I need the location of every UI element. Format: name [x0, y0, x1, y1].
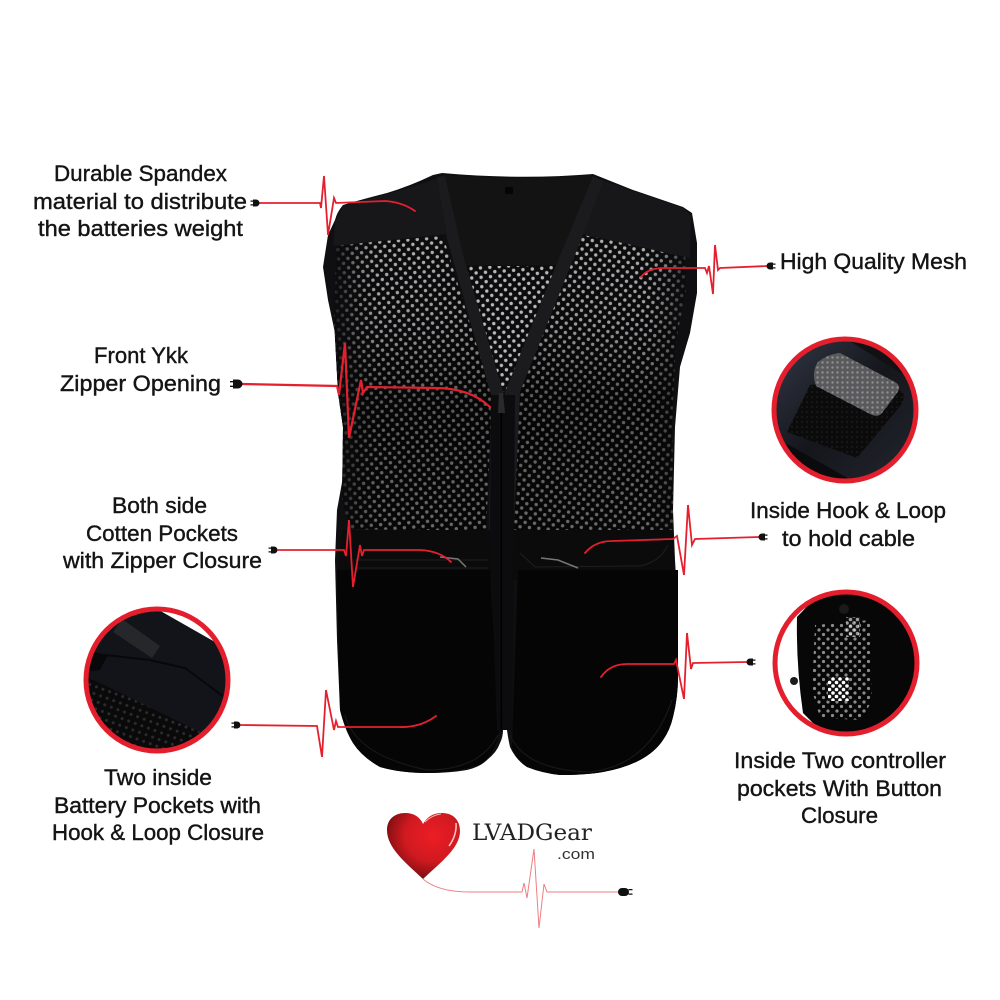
back neck panel [444, 175, 593, 265]
logo wordmark: LVADGear [472, 821, 592, 846]
callout line: mesh [641, 245, 776, 294]
text: spandex: Durable Spandex [54, 161, 228, 186]
text: controller pockets: Closure [801, 803, 878, 828]
right shoulder yoke [582, 180, 691, 258]
left pocket zipper [355, 557, 488, 568]
plug icon [268, 546, 278, 554]
plug icon [767, 262, 776, 270]
callout line: hook and loop [585, 505, 768, 575]
text: spandex [33, 161, 247, 241]
left shoulder yoke [333, 178, 446, 246]
text: side pockets: Cotten Pockets [86, 521, 238, 546]
hem binding [345, 700, 672, 772]
callout line: side pockets [268, 520, 451, 587]
text: side pockets [62, 493, 262, 573]
plug icon [230, 380, 242, 388]
plug icon [758, 534, 768, 540]
text: battery pockets: Two inside [104, 765, 212, 790]
text: hook and loop [750, 498, 946, 551]
vest [323, 173, 697, 775]
text: hook and loop: to hold cable [782, 526, 915, 551]
detail circle: controller pocket [770, 590, 925, 740]
text: battery pockets: Battery Pockets with [54, 793, 261, 818]
text: mesh: High Quality Mesh [780, 249, 967, 274]
text: side pockets: Both side [112, 493, 207, 518]
text: spandex: the batteries weight [38, 216, 244, 241]
detail circle: battery pocket [84, 606, 230, 754]
plug icon [232, 722, 240, 728]
text: side pockets: with Zipper Closure [62, 548, 262, 573]
plug icon [618, 888, 632, 896]
left zipper band [437, 176, 504, 530]
heart icon [387, 813, 460, 879]
plug icon [250, 200, 260, 206]
text: zipper [60, 343, 221, 396]
logo domain: .com [557, 846, 595, 863]
logo heartbeat line [423, 849, 621, 928]
detail circle: hook and loop [770, 335, 920, 485]
plug icon [746, 658, 756, 666]
infographic canvas [34, 164, 966, 928]
text: controller pockets [734, 748, 947, 828]
text: battery pockets [52, 765, 264, 845]
text: controller pockets: pockets With Button [737, 776, 942, 801]
text: controller pockets: Inside Two controller [734, 748, 947, 773]
callout line: zipper [230, 343, 490, 438]
logo: LVADGear [387, 813, 632, 928]
text: hook and loop: Inside Hook & Loop [750, 498, 946, 523]
callout line: spandex [250, 176, 415, 235]
right pocket zipper [520, 545, 668, 568]
right front mesh [512, 235, 686, 531]
left front mesh [334, 236, 492, 531]
text: spandex: material to distribute [33, 189, 247, 214]
lower pockets [337, 570, 678, 775]
right zipper band [505, 176, 603, 530]
callout line: battery pockets [232, 690, 436, 757]
front placket and zipper [490, 393, 515, 732]
vest body [323, 173, 697, 775]
callout line: controller pockets [601, 633, 756, 699]
text: battery pockets: Hook & Loop Closure [52, 820, 264, 845]
neck label [505, 187, 513, 194]
text: zipper: Zipper Opening [60, 371, 221, 396]
lower pocket band [337, 530, 675, 580]
text: zipper: Front Ykk [94, 343, 189, 368]
centre back mesh [466, 266, 556, 392]
